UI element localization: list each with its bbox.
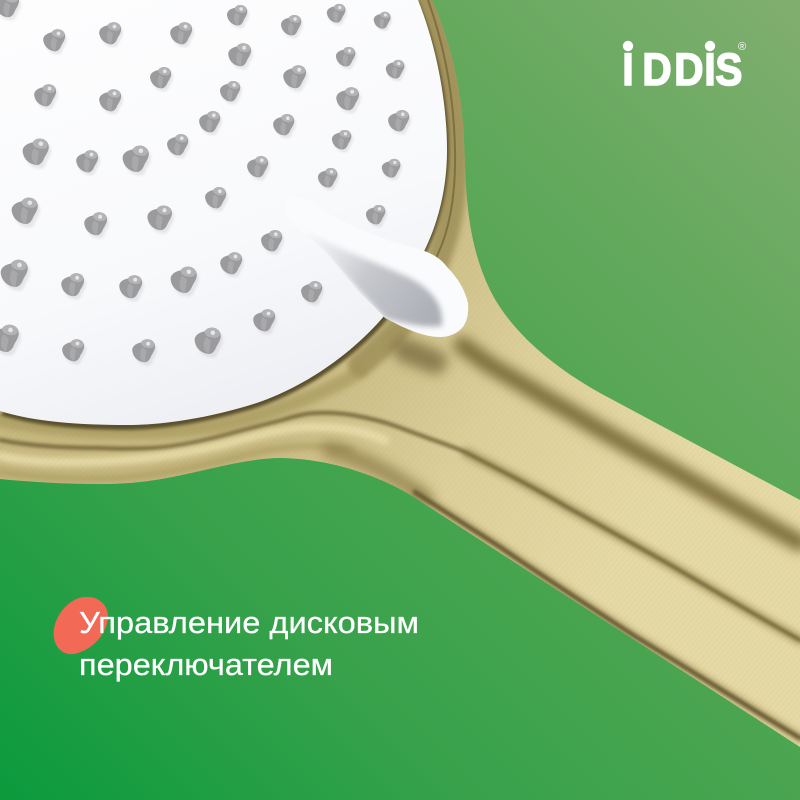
lever shading [316, 240, 446, 330]
caption accent blob [54, 597, 108, 654]
caption text: Управление дисковым [79, 605, 419, 640]
brand logo: IDDIS [622, 45, 742, 96]
lever body [285, 197, 468, 337]
spray nozzles [0, 0, 411, 366]
brand logo: ® [738, 41, 746, 53]
white face [0, 0, 447, 425]
caption text [79, 605, 419, 682]
dark seam [0, 0, 449, 430]
caption text: переключателем [79, 647, 333, 682]
shower face plate [0, 0, 449, 430]
selector lever [320, 242, 468, 337]
